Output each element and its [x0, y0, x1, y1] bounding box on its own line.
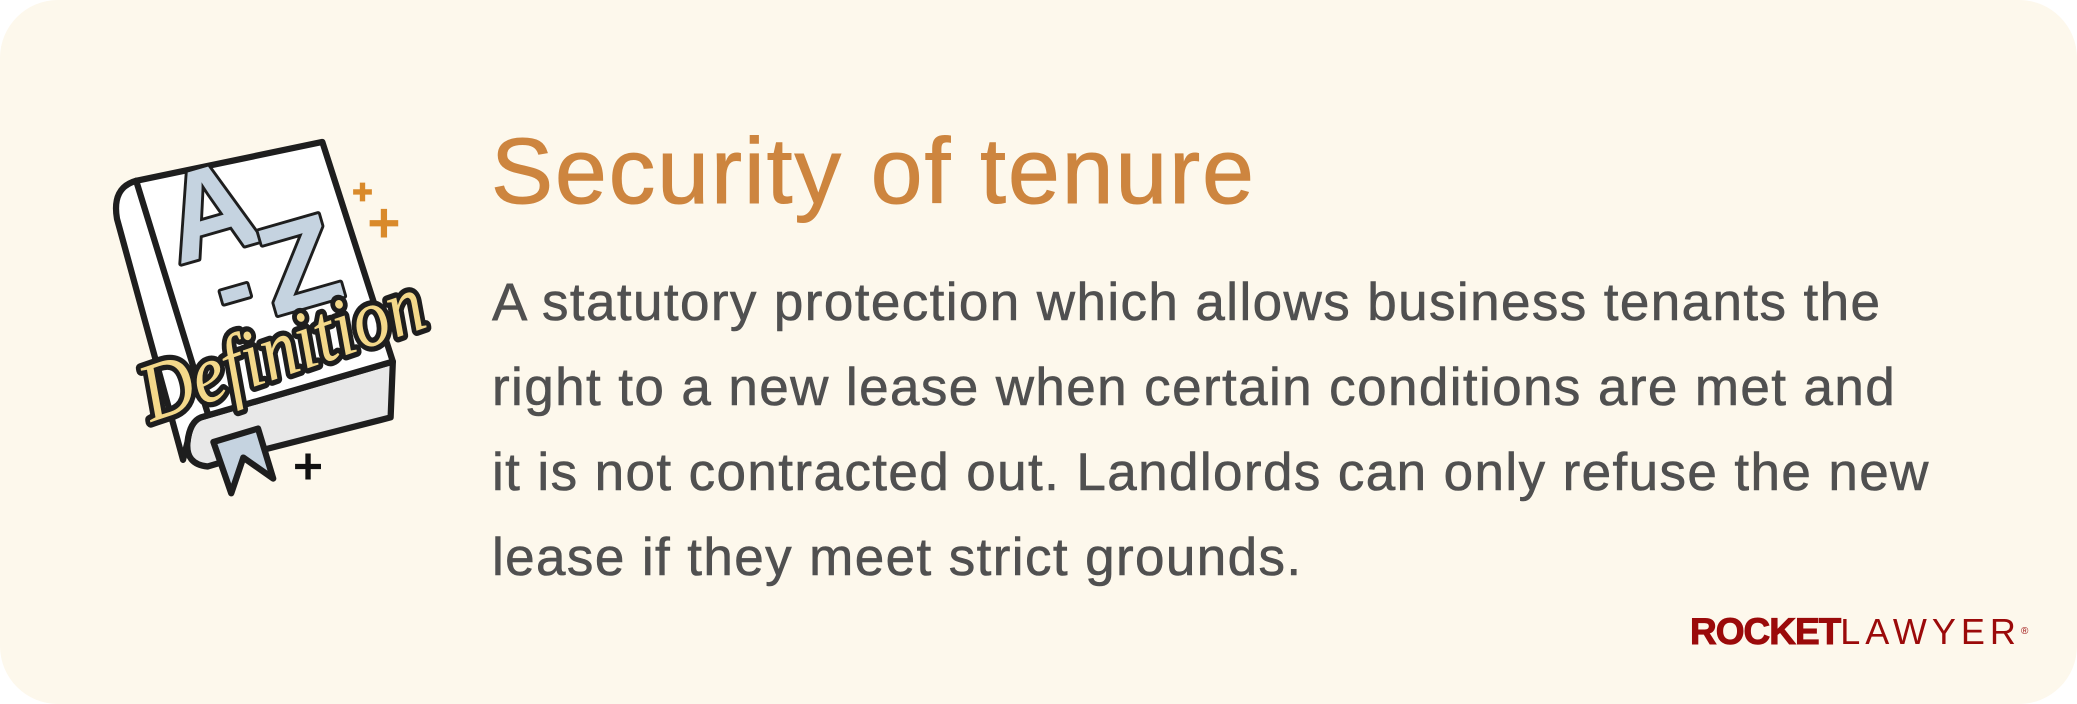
definition text: lease if they meet strict grounds.: [492, 528, 1303, 587]
bookmark: [213, 429, 273, 493]
definition text: right to a new lease when certain conditions are met and: [492, 358, 1896, 417]
definition text: A statutory protection which allows business tenants the: [492, 273, 1881, 332]
letters A-Z: [147, 114, 355, 364]
letters A-Z: -: [199, 222, 267, 347]
definition text: it is not contracted out. Landlords can only refuse the new: [492, 443, 1930, 502]
definition text: [492, 273, 1930, 587]
letters A-Z: A: [147, 132, 273, 291]
sparkles: [298, 185, 395, 477]
logo: Rocket Lawyer: ROCKETLAWYER®: [1690, 611, 2028, 652]
Definition script: Definition: [126, 256, 436, 439]
cover: [116, 142, 393, 460]
pages: [187, 362, 393, 467]
letters A-Z: Z: [243, 187, 355, 342]
icon: A-Z definition book: [112, 132, 436, 496]
title: Security of tenure: [491, 119, 1256, 223]
